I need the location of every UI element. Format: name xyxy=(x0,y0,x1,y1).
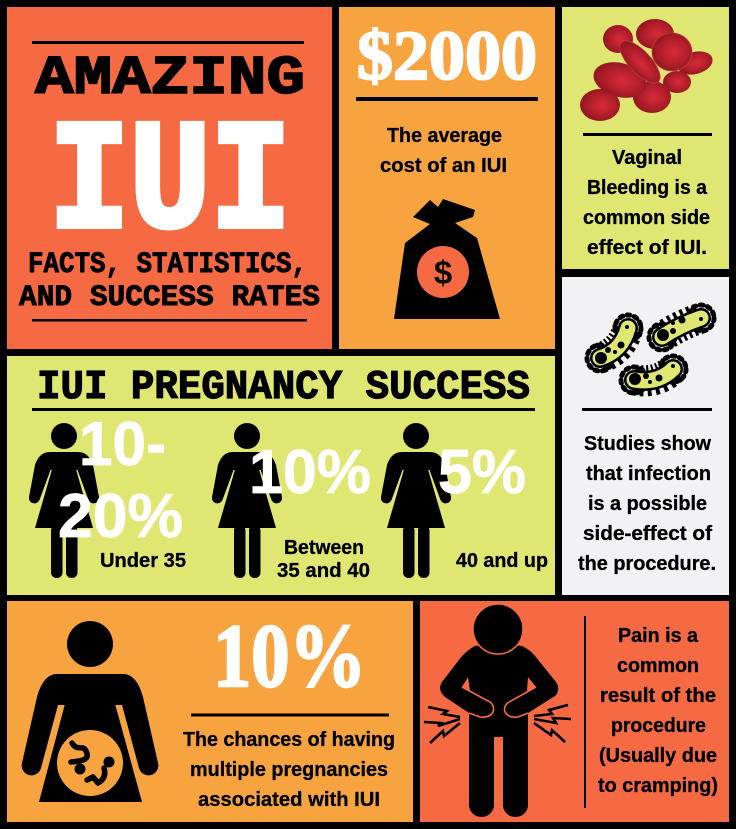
multiples text: The chances of having xyxy=(183,729,395,751)
label: under 35: Under 35 xyxy=(100,550,186,572)
bleeding text xyxy=(583,147,710,259)
panel: infection xyxy=(562,277,729,595)
pain text: Pain is a xyxy=(618,625,699,647)
bleeding text: effect of IUI. xyxy=(587,237,707,259)
panel: pregnancy success xyxy=(7,356,555,595)
cost description: cost of an IUI xyxy=(380,155,507,177)
multiples text: associated with IUI xyxy=(198,789,380,811)
subtitle: AND SUCCESS RATES xyxy=(19,281,320,315)
icon: bacteria xyxy=(587,305,714,393)
panel: pain xyxy=(420,601,729,822)
heading: pregnancy success: IUI PREGNANCY SUCCESS xyxy=(37,365,530,411)
infection text: is a possible xyxy=(588,493,707,515)
infection text xyxy=(578,433,716,575)
icon: money bag: $ xyxy=(434,254,452,291)
icon: red blood cells xyxy=(580,19,715,121)
label: between 35 and 40 xyxy=(277,537,370,582)
bleeding text: Bleeding is a xyxy=(587,177,708,199)
infection text: Studies show xyxy=(584,433,711,455)
multiples text xyxy=(183,729,395,811)
label: between 35 and 40: Between xyxy=(284,537,364,559)
subtitle xyxy=(19,248,320,315)
panel: vaginal bleeding xyxy=(562,7,729,269)
pain text: procedure xyxy=(611,715,706,737)
panel: average cost xyxy=(339,7,555,349)
panel: multiple pregnancies xyxy=(7,601,413,822)
infection text: the procedure. xyxy=(578,553,716,575)
pain text: common xyxy=(617,655,699,677)
stat: 10-20 percent: 10- xyxy=(79,410,166,479)
icon: person with cramps xyxy=(424,604,571,817)
icon: money bag xyxy=(394,199,500,319)
stat: 10 percent multiples: 10% xyxy=(213,607,366,706)
icon: woman under 35 xyxy=(29,423,99,578)
subtitle: FACTS, STATISTICS, xyxy=(28,248,307,282)
label: 40 and up: 40 and up xyxy=(456,550,548,572)
icon: pregnant woman xyxy=(22,621,158,802)
icon: woman 40 and up xyxy=(381,423,451,578)
infection text: side-effect of xyxy=(583,523,712,545)
cost description xyxy=(380,125,507,177)
pain text: (Usually due xyxy=(599,745,717,767)
stat: 10 percent: 10% xyxy=(249,438,371,507)
stat: 10-20 percent: 20% xyxy=(58,482,183,551)
cost description: The average xyxy=(387,125,502,147)
stat: 10-20 percent xyxy=(58,410,183,551)
pain text: result of the xyxy=(600,685,716,707)
heading: amazing: AMAZING xyxy=(35,47,305,110)
bleeding text: common side xyxy=(583,207,710,229)
heading: IUI: IUI xyxy=(49,97,291,273)
panel: title xyxy=(7,7,332,349)
bleeding text: Vaginal xyxy=(612,147,682,169)
multiples text: multiple pregnancies xyxy=(190,759,388,781)
pain text: to cramping) xyxy=(598,775,718,797)
icon: woman 35 to 40 xyxy=(212,423,282,578)
label: between 35 and 40: 35 and 40 xyxy=(277,560,370,582)
stat: 5 percent: 5% xyxy=(438,438,526,507)
infection text: that infection xyxy=(586,463,711,485)
cost figure: $2000 xyxy=(357,18,537,95)
pain text xyxy=(598,625,718,797)
